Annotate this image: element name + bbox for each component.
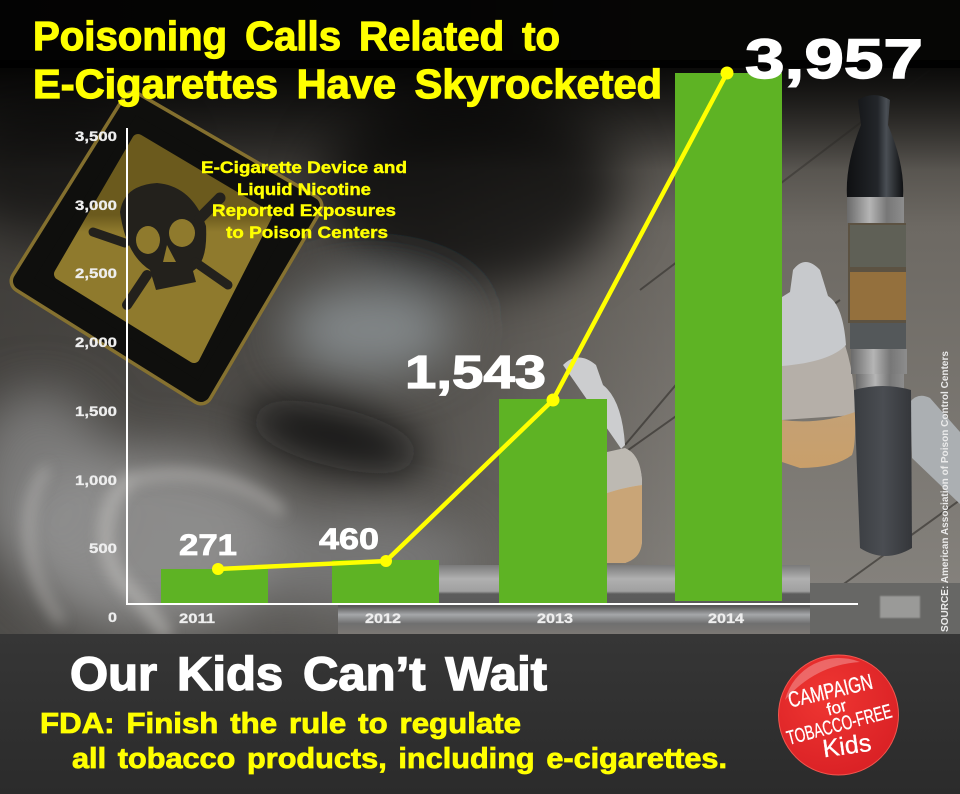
product: vertical e-cigarette	[847, 95, 912, 556]
x-axis labels: 2014	[708, 610, 744, 626]
x-axis labels	[179, 610, 744, 626]
logo: Campaign for Tobacco-Free Kids	[778, 655, 898, 775]
chart subtitle: Reported Exposures	[212, 202, 396, 220]
value labels: 460	[319, 523, 379, 556]
y-axis labels: 1,500	[75, 403, 117, 419]
chart subtitle	[201, 159, 407, 242]
x-axis labels: 2012	[365, 610, 401, 626]
y-axis labels: 3,500	[75, 128, 117, 144]
chart subtitle: to Poison Centers	[226, 224, 388, 242]
y-axis labels: 1,000	[75, 472, 117, 488]
title	[33, 13, 662, 107]
y-axis labels: 500	[89, 540, 117, 556]
value labels: 3,957	[745, 27, 923, 90]
y-axis labels	[75, 128, 117, 625]
title: Poisoning Calls Related to	[33, 13, 560, 59]
logo: Campaign for Tobacco-Free Kids: for	[825, 696, 849, 719]
bars	[161, 73, 782, 603]
slogan: Our Kids Can’t Wait	[70, 647, 547, 700]
value labels: 1,543	[405, 346, 546, 398]
logo: Campaign for Tobacco-Free Kids: CAMPAIGN	[786, 669, 875, 713]
logo: Campaign for Tobacco-Free Kids: Kids	[821, 729, 873, 763]
icon: poison warning sign with skull and crossbones	[22, 103, 311, 393]
x-axis labels: 2013	[537, 610, 573, 626]
chart: poison center exposures 2011-2014	[75, 27, 923, 626]
logo: Campaign for Tobacco-Free Kids: TOBACCO-FREE	[784, 701, 894, 750]
call to action: FDA: Finish the rule to regulate	[40, 708, 521, 740]
top dark title band	[0, 0, 960, 68]
trend line	[212, 66, 734, 575]
y-axis labels: 3,000	[75, 197, 117, 213]
product: dropper bottle behind 2013 bar	[563, 358, 642, 563]
y-axis labels: 0	[108, 609, 117, 625]
x-axis labels: 2011	[179, 610, 215, 626]
product: silver tube at right edge	[910, 396, 960, 504]
axes	[126, 128, 858, 604]
chart subtitle: Liquid Nicotine	[237, 181, 371, 199]
call to action	[40, 708, 727, 775]
y-axis labels: 2,500	[75, 265, 117, 281]
value labels: 271	[179, 529, 237, 562]
title: E-Cigarettes Have Skyrocketed	[33, 61, 662, 107]
chart subtitle: E-Cigarette Device and	[201, 159, 407, 177]
call to action: all tobacco products, including e-cigarettes.	[72, 743, 727, 775]
product: horizontal e-cigarette pen	[338, 565, 960, 634]
value labels	[179, 27, 923, 562]
bottom dark band	[0, 634, 960, 794]
product: dropper bottle beside 2014 bar	[782, 262, 855, 468]
source note: SOURCE: American Association of Poison Control Centers	[939, 351, 951, 632]
y-axis labels: 2,000	[75, 334, 117, 350]
